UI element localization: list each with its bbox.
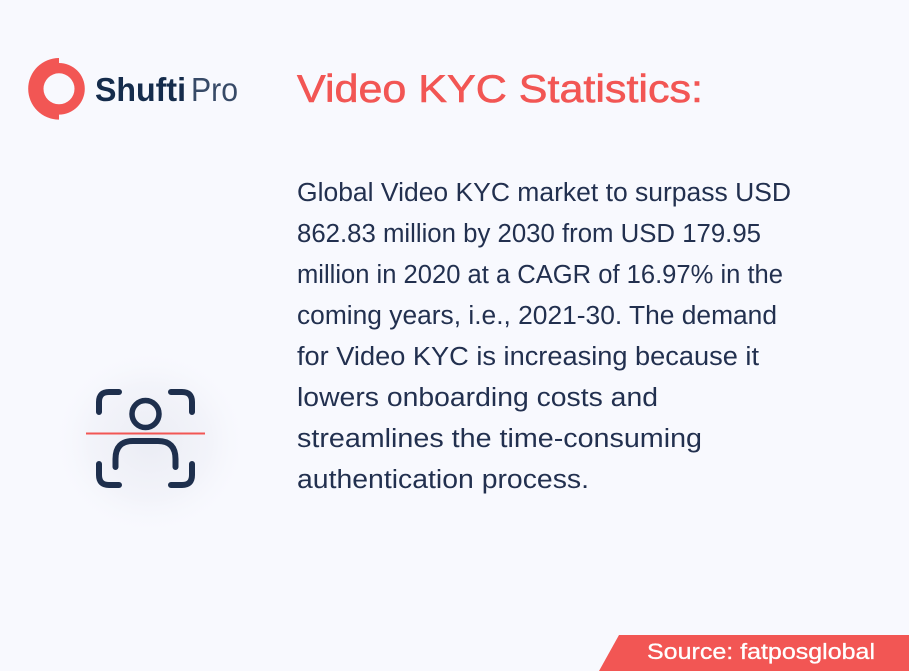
icon: face scan xyxy=(50,347,250,537)
body text block: 862.83 million by 2030 from USD 179.95 xyxy=(297,220,761,248)
logo wordmark xyxy=(95,71,238,108)
source banner xyxy=(599,635,909,671)
body text block: million in 2020 at a CAGR of 16.97% in the xyxy=(297,261,783,289)
title: Video KYC Statistics: xyxy=(297,68,703,111)
body text block: Global Video KYC market to surpass USD xyxy=(297,179,791,207)
logo wordmark: Shufti xyxy=(95,71,186,108)
person head xyxy=(132,400,159,428)
logo wordmark: Pro xyxy=(191,71,238,108)
scan frame corners xyxy=(99,392,192,485)
body text block: for Video KYC is increasing because it xyxy=(297,343,759,371)
source banner: Source: fatposglobal xyxy=(647,639,875,664)
body text block: streamlines the time-consuming xyxy=(297,425,702,453)
body text block: authentication process. xyxy=(297,466,589,494)
logo mark: red ring xyxy=(28,58,85,120)
person shoulders xyxy=(116,441,176,467)
body text block: lowers onboarding costs and xyxy=(297,384,658,412)
scan line xyxy=(86,432,205,434)
body text block xyxy=(297,179,791,494)
body text block: coming years, i.e., 2021-30. The demand xyxy=(297,302,777,330)
logo: Shufti Pro xyxy=(28,58,238,120)
